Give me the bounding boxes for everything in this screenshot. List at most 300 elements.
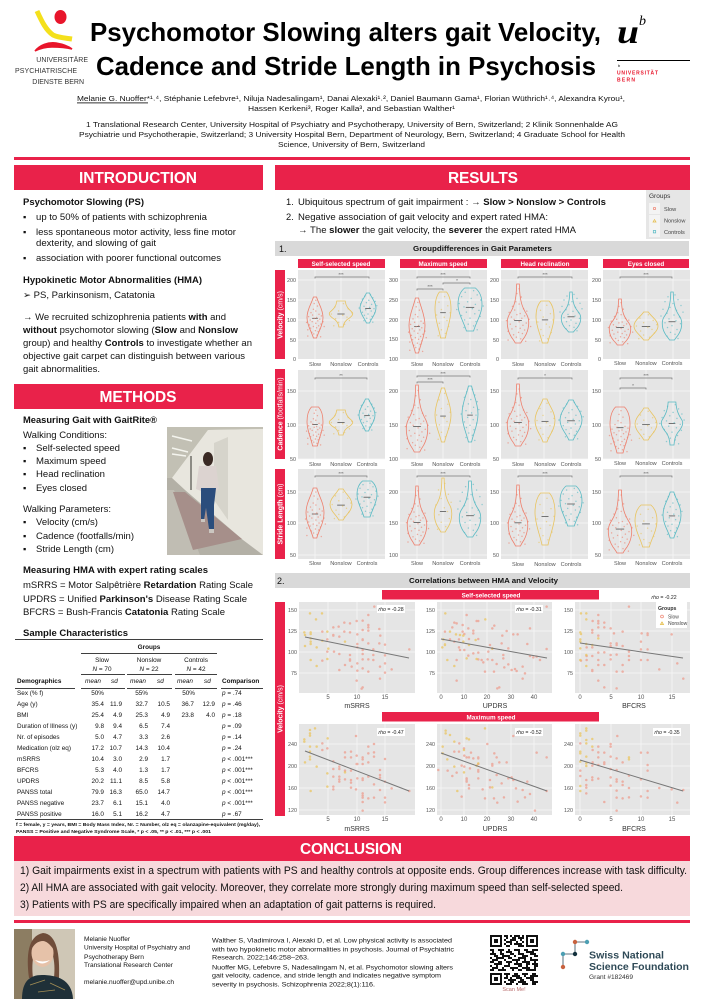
condition headers: Self-selected speed	[312, 261, 371, 268]
text block: psychomotor slowing: ▪	[23, 227, 26, 237]
scatter plot: mSRRS, self-selected: rho = -0.28	[378, 607, 404, 613]
table: sample characteristics: 4.7	[161, 811, 170, 818]
table: sample characteristics: 1.3	[139, 767, 148, 774]
text block: study aim: without psychomotor slowing ( Slow and Nonslow	[22, 325, 239, 335]
violin plot: velocity, eyes closed	[592, 270, 690, 367]
table: sample characteristics: 5.3	[95, 767, 104, 774]
scatter plot: BFCRS, maximum: 240	[564, 742, 573, 748]
violin plot: stride length, maximum: 200	[389, 490, 398, 496]
table: sample characteristics: 50%	[91, 690, 104, 697]
logo: university psychiatric services: UNIVERSITÄRE	[36, 56, 88, 64]
table: sample characteristics: 55%	[135, 690, 148, 697]
table: sample characteristics: 10.5	[158, 701, 170, 708]
panel: methods	[14, 384, 263, 835]
violin plot: cadence, self-selected: Nonslow	[330, 462, 353, 468]
scatter plot: BFCRS, maximum: 120	[564, 808, 573, 814]
table: sample characteristics: 16.0	[92, 811, 104, 818]
section header 2	[275, 573, 690, 588]
table: sample characteristics: 1.7	[161, 756, 170, 763]
text block: measuring gait: ▪	[23, 469, 26, 479]
section header 2: 2.	[277, 576, 285, 586]
text block: measuring gait: ▪	[23, 443, 26, 453]
scatter plot: BFCRS, maximum: 15	[669, 817, 676, 823]
text block: measuring gait: Stride Length (cm)	[36, 544, 114, 554]
affiliations	[79, 120, 625, 149]
violin plot: cadence, self-selected	[287, 370, 385, 468]
scatter plot: mSRRS, maximum: 160	[288, 786, 297, 792]
authors: Melanie G. Nuoffer*¹˒⁴, Stéphanie Lefebvre¹, Niluja Nadesalingam¹, Danai Alexaki¹˒², Daniel Baumann Gama¹, Florian Wüthrich¹˒⁴, Alexandra Kyrou¹,	[77, 94, 625, 103]
scatter plot: BFCRS, self-selected: BFCRS	[622, 703, 646, 710]
violin plot: velocity, maximum: 150	[389, 337, 398, 343]
table: sample characteristics: N = 42	[186, 666, 206, 673]
table: sample characteristics: PANSS = Positive and Negative Syndrome Scale, * p < .05, ** p < .01, *** p < .001	[16, 829, 211, 835]
legend: groups: Groups	[649, 193, 671, 200]
violin plot: stride length, head reclination: 150	[490, 490, 499, 496]
table: sample characteristics	[15, 628, 263, 835]
table: sample characteristics: mean	[177, 678, 193, 685]
text block: contact: Melanie Nuoffer	[84, 936, 131, 943]
violin plot: velocity, maximum: ***	[440, 272, 446, 277]
scatter plot: UPDRS, self-selected: 150	[426, 608, 435, 614]
violin plot: stride length, self-selected: Nonslow	[330, 561, 353, 567]
photo: gait carpet in corridor	[167, 427, 263, 555]
section header 2: Correlations between HMA and Velocity	[409, 576, 559, 585]
text block: expert rating scales: mSRRS = Motor Salpêtrière Retardation Rating Scale	[23, 580, 253, 590]
table: sample characteristics: sd	[111, 678, 118, 685]
scatter plot: UPDRS, self-selected	[426, 602, 552, 710]
logo: university psychiatric services	[15, 10, 88, 86]
scatter plot: BFCRS, self-selected: 125	[564, 629, 573, 635]
text block: measuring gait: ▪	[23, 544, 26, 554]
text block: expert rating scales: Measuring HMA with expert rating scales	[23, 565, 208, 575]
violin plot: stride length, eyes closed: 150	[592, 490, 601, 496]
table: sample characteristics: 9.4	[113, 723, 122, 730]
scatter plot: BFCRS, maximum: 5	[609, 817, 613, 823]
violin plot: velocity, maximum: ***	[427, 284, 433, 289]
violin plot: stride length, eyes closed: 50	[595, 553, 601, 559]
text block: hypokinetic motor abnormalities: ➢ PS, Parkinsonism, Catatonia	[23, 290, 156, 300]
scatter plot: BFCRS, self-selected: 100	[564, 650, 573, 656]
violin plot: stride length, head reclination: Slow	[512, 562, 525, 568]
violin plot: cadence, maximum: 200	[389, 389, 398, 395]
scatter plot: mSRRS, maximum	[288, 724, 415, 833]
violin plot: stride length, head reclination: Controls	[561, 562, 582, 568]
scatter plot: UPDRS, self-selected: 100	[426, 650, 435, 656]
heading: results	[275, 165, 690, 190]
logo: Swiss National Science Foundation: Science Foundation	[589, 962, 689, 973]
condition header: self-selected speed: Self-selected speed	[462, 592, 521, 600]
violin plot: stride length, self-selected: Slow	[309, 561, 322, 567]
table: sample characteristics: 4.0	[161, 800, 170, 807]
scatter plot: BFCRS, self-selected: rho = -0.22	[651, 595, 677, 601]
table: sample characteristics: 35.4	[92, 701, 104, 708]
affiliations: Psychiatrie und Psychotherapie, Switzerland; 3 University Hospital Bern, Department of Neurology, Bern, Switzerland; 4 Graduate School for Health	[79, 130, 625, 139]
scatter plot: UPDRS, self-selected: UPDRS	[483, 703, 508, 710]
text block: measuring gait: Self-selected speed	[36, 443, 120, 453]
violin plot: cadence, maximum: Controls	[460, 462, 481, 468]
violin plot: cadence, maximum: Nonslow	[432, 462, 455, 468]
text block: key findings: → The slower the gait velocity, the severer the expert rated HMA	[298, 225, 577, 235]
table: sample characteristics: Demographics	[17, 678, 62, 685]
violin plot: cadence, maximum: Slow	[411, 462, 424, 468]
violin plot: velocity, head reclination: 150	[490, 298, 499, 304]
table: sample characteristics: 2.9	[139, 756, 148, 763]
text block: psychomotor slowing: dexterity, and slowing of gait	[36, 238, 156, 248]
violin plot: velocity, self-selected: 50	[290, 338, 296, 344]
violin plot: velocity, eyes closed: Nonslow	[635, 361, 658, 367]
panel: conclusion: CONCLUSION	[300, 841, 402, 858]
text block: key findings: 2.	[286, 212, 294, 222]
scatter plot: mSRRS, self-selected: 150	[288, 608, 297, 614]
text block: contact: Translational Research Center	[84, 962, 174, 969]
violin plot: velocity, self-selected: 100	[287, 318, 296, 324]
table: sample characteristics: PANSS total	[17, 789, 52, 796]
logo: Swiss National Science Foundation: Grant #182469	[589, 974, 633, 981]
table: sample characteristics: PANSS negative	[17, 800, 65, 807]
violin plot: cadence, head reclination: 50	[493, 457, 499, 463]
scatter plot: UPDRS, self-selected: rho = -0.31	[516, 607, 542, 613]
table: sample characteristics: 50%	[182, 690, 195, 697]
row tab: stride length	[275, 469, 285, 559]
affiliations: 1 Translational Research Center, University Hospital of Psychiatry and Psychotherapy, University of Bern, Switzerland; 2 Klinik Sonnenhalde AG	[86, 120, 618, 129]
table: sample characteristics: 14.3	[136, 745, 148, 752]
scatter plot: BFCRS, maximum: 10	[638, 817, 645, 823]
violin plot: velocity, eyes closed: Slow	[614, 361, 627, 367]
scatter plot: mSRRS, maximum: rho = -0.47	[378, 730, 404, 736]
affiliations: Science, University of Bern, Switzerland	[278, 140, 425, 149]
row tab: velocity	[275, 270, 285, 359]
table: sample characteristics: 15.1	[136, 800, 148, 807]
table: sample characteristics: p = .09	[221, 723, 242, 730]
text block: contact: University Hospital of Psychiatry and	[84, 944, 190, 952]
table: sample characteristics: p = .46	[221, 701, 242, 708]
violin plot: velocity, eyes closed: 50	[595, 338, 601, 344]
table: sample characteristics: 23.8	[182, 712, 194, 719]
scatter plot: mSRRS, self-selected: mSRRS	[344, 703, 370, 710]
table: sample characteristics: p < .001***	[221, 767, 253, 774]
table: sample characteristics: 23.7	[92, 800, 104, 807]
scatter plot: UPDRS, maximum: UPDRS	[483, 826, 508, 833]
text block: measuring gait: Head reclination	[36, 469, 105, 479]
violin plot: velocity, self-selected: 0	[293, 357, 296, 363]
violin plot: stride length, eyes closed: Nonslow	[635, 561, 658, 567]
scatter plot: UPDRS, self-selected: 30	[508, 695, 515, 701]
table: sample characteristics: 65.0	[136, 789, 148, 796]
scatter plot: BFCRS, maximum: BFCRS	[622, 826, 646, 833]
text block: psychomotor slowing: Psychomotor Slowing (PS)	[23, 197, 144, 207]
row tab: stride length: Stride Length (cm)	[278, 483, 284, 545]
table: sample characteristics: 79.9	[92, 789, 104, 796]
scatter plot: mSRRS, self-selected: 125	[288, 629, 297, 635]
table: sample characteristics: 3.0	[113, 756, 122, 763]
table: sample characteristics: 10.4	[158, 745, 170, 752]
violin plot: stride length, head reclination: ***	[542, 471, 548, 476]
violin plot: stride length, maximum: 150	[389, 521, 398, 527]
text block: measuring gait: Maximum speed	[36, 456, 106, 466]
panel: results	[275, 165, 690, 833]
text block: references: Nuoffer MG, Lefebvre S, Nadesalingam N, et al. Psychomotor slowing alters	[212, 964, 454, 972]
violin plot: cadence, eyes closed: ***	[643, 373, 649, 378]
table: sample characteristics: N = 22	[139, 666, 159, 673]
panel: introduction	[14, 165, 263, 374]
violin plot: velocity, maximum: Controls	[460, 362, 481, 368]
table: sample characteristics: 6.5	[139, 723, 148, 730]
logo: Swiss National Science Foundation: Swiss National	[589, 950, 664, 962]
table: sample characteristics: Duration of Illness (y)	[17, 723, 77, 730]
table: sample characteristics: 4.9	[113, 712, 122, 719]
scatter plot: mSRRS, self-selected: 100	[288, 650, 297, 656]
table: sample characteristics: Slow	[95, 657, 109, 664]
scatter plot: UPDRS, maximum: 240	[426, 742, 435, 748]
scatter plot: UPDRS, maximum: 120	[426, 808, 435, 814]
text block: psychomotor slowing: up to 50% of patients with schizophrenia	[36, 212, 208, 222]
scatter plot: UPDRS, maximum: 20	[484, 817, 491, 823]
table: sample characteristics: mean	[130, 678, 146, 685]
panel: conclusion: 3) Patients with PS are specifically impaired when an adaptation of gait patterns is required.	[20, 899, 436, 911]
violin plot: velocity, maximum: 100	[389, 357, 398, 363]
text block: references: gait velocity, cadence, and stride length and indicates negative symptom	[212, 972, 441, 980]
text block: study aim	[22, 312, 252, 374]
text block: hypokinetic motor abnormalities	[23, 275, 202, 300]
row tab: velocity scatter: Velocity (cm/s)	[278, 685, 284, 733]
table: sample characteristics: 17.2	[92, 745, 104, 752]
table: sample characteristics: Age (y)	[17, 701, 38, 708]
table: sample characteristics: Medication (olz eq)	[17, 745, 71, 752]
heading: results: RESULTS	[448, 170, 518, 187]
violin plot: velocity, head reclination: 100	[490, 318, 499, 324]
scatter plot: UPDRS, self-selected: 125	[426, 629, 435, 635]
scatter plot: BFCRS, self-selected: 10	[638, 695, 645, 701]
table: sample characteristics: f = female, y = years, BMI = Body Mass Index, Nr. = Number, olz eq = olanzapine-equivalent (mg/day),	[16, 822, 261, 828]
condition header: self-selected speed	[382, 590, 599, 600]
QR code: Scan Me!	[502, 987, 526, 993]
title	[90, 17, 601, 81]
violin plot: cadence, eyes closed: 150	[592, 389, 601, 395]
scatter plot: UPDRS, maximum: 30	[508, 817, 515, 823]
section header 1: Groupdifferences in Gait Parameters	[413, 244, 552, 253]
row tab: cadence: Cadence (footfalls/min)	[278, 377, 284, 451]
table: sample characteristics: 8.5	[139, 778, 148, 785]
violin plot: velocity, self-selected: ***	[338, 272, 344, 277]
table: sample characteristics: Controls	[184, 657, 208, 664]
violin plot: velocity, maximum: Nonslow	[432, 362, 455, 368]
violin plot: velocity, eyes closed: Controls	[662, 361, 683, 367]
violin plot: cadence, self-selected: **	[339, 373, 343, 378]
row tab: cadence	[275, 369, 285, 459]
violin plot: cadence, maximum: ***	[427, 377, 433, 382]
violin plot: velocity, self-selected: Controls	[358, 362, 379, 368]
scatter plot: mSRRS, maximum: mSRRS	[344, 826, 370, 833]
text block: measuring gait: ▪	[23, 456, 26, 466]
violin plot: cadence, maximum: ***	[440, 371, 446, 376]
text block: measuring gait: ▪	[23, 517, 26, 527]
violin plot: stride length, maximum: ***	[440, 471, 446, 476]
authors: Hassen Kerkeni³, Roger Kalla³, and Sebastian Walther¹	[248, 104, 456, 113]
scatter plot: UPDRS, maximum: 0	[439, 817, 443, 823]
text block: measuring gait: Cadence (footfalls/min)	[36, 531, 134, 541]
table: sample characteristics: 5.0	[95, 734, 104, 741]
violin plot: stride length, self-selected: 50	[290, 553, 296, 559]
violin plot: cadence, head reclination: *	[544, 373, 546, 378]
condition header: maximum speed: Maximum speed	[466, 714, 516, 722]
scatter plot: mSRRS, self-selected	[288, 602, 415, 710]
logo: university of Bern: b	[618, 63, 621, 68]
scatter plot: mSRRS, maximum: 15	[382, 817, 389, 823]
text block: contact: Psychotherapy Bern	[84, 954, 144, 961]
logo: university of Bern: u	[617, 14, 639, 51]
text block: measuring gait	[23, 415, 157, 554]
scatter plot: mSRRS, self-selected: 10	[354, 695, 361, 701]
table: sample characteristics: sd	[157, 678, 164, 685]
table: sample characteristics: p = .67	[221, 811, 242, 818]
table: sample characteristics: Sex (% f)	[17, 690, 43, 697]
text block: measuring gait: Walking Conditions:	[23, 430, 107, 440]
heading: methods	[14, 384, 263, 409]
logo: university psychiatric services: PSYCHIATRISCHE	[15, 68, 77, 75]
text block: key findings: Negative association of gait velocity and expert rated HMA:	[298, 212, 548, 222]
table: sample characteristics: mSRRS	[17, 756, 40, 763]
legend: groups: Slow	[664, 207, 677, 213]
scatter plot: BFCRS, maximum: 160	[564, 786, 573, 792]
violin plot: stride length, self-selected: 100	[287, 521, 296, 527]
table: sample characteristics: 20.2	[92, 778, 104, 785]
text block: measuring gait: Measuring Gait with GaitRite®	[23, 415, 157, 425]
scatter plot: mSRRS, self-selected: 75	[291, 671, 297, 677]
section header 1	[275, 241, 689, 256]
table: sample characteristics: 4.7	[113, 734, 122, 741]
table: sample characteristics: 36.7	[182, 701, 194, 708]
QR code	[490, 935, 538, 993]
violin plot: velocity, self-selected: 200	[287, 278, 296, 284]
violin plot: stride length, eyes closed: Slow	[614, 561, 627, 567]
table: sample characteristics: 10.4	[92, 756, 104, 763]
violin plot: stride length, self-selected: 150	[287, 490, 296, 496]
table: sample characteristics: p < .001***	[221, 778, 253, 785]
violin plot: velocity, maximum	[389, 270, 487, 368]
violin plot: cadence, eyes closed: 100	[592, 423, 601, 429]
violin plot: velocity, head reclination	[490, 270, 588, 368]
panel: conclusion	[14, 836, 690, 916]
violin plot: cadence, head reclination: Controls	[561, 462, 582, 468]
scatter plot: UPDRS, maximum: rho = -0.52	[516, 730, 542, 736]
scatter plot: mSRRS, maximum: 5	[326, 817, 330, 823]
violin plot: stride length, self-selected	[287, 469, 385, 567]
text block: study aim: group) and healthy Controls to investigate whether an	[23, 338, 252, 348]
violin plot: velocity, head reclination: 0	[496, 357, 499, 363]
table: sample characteristics: N = 70	[92, 666, 112, 673]
scatter plot: UPDRS, maximum: 40	[531, 817, 538, 823]
table: sample characteristics: 16.2	[136, 811, 148, 818]
text block: references: Research. 2022;146:258–263.	[212, 954, 309, 962]
violin plot: cadence, eyes closed: Controls	[662, 461, 683, 467]
table: sample characteristics: 14.7	[158, 789, 170, 796]
legend: scatter groups	[656, 602, 688, 628]
text block: psychomotor slowing: ▪	[23, 212, 26, 222]
text block: measuring gait: Eyes closed	[36, 483, 87, 493]
violin plot: velocity, head reclination: 200	[490, 278, 499, 284]
scatter plot: UPDRS, self-selected: 20	[484, 695, 491, 701]
text block: psychomotor slowing: association with poorer functional outcomes	[36, 253, 221, 263]
table: sample characteristics: mean	[85, 678, 101, 685]
table: sample characteristics: BFCRS	[17, 767, 39, 774]
text block: measuring gait: ▪	[23, 483, 26, 493]
logo: university of Bern	[617, 14, 690, 84]
condition headers: Maximum speed	[418, 261, 468, 268]
text block: key findings	[286, 197, 606, 235]
scatter plot: UPDRS, self-selected: 10	[461, 695, 468, 701]
violin plot: velocity, eyes closed: 150	[592, 298, 601, 304]
table: sample characteristics: 6.1	[113, 800, 122, 807]
text block: references: severity in psychosis. Schizophrenia 2022;8(1):116.	[212, 982, 375, 988]
violin plot: cadence, eyes closed: Nonslow	[635, 461, 658, 467]
text block: hypokinetic motor abnormalities: Hypokinetic Motor Abnormalities (HMA)	[23, 275, 202, 285]
text block: study aim: objective gait carpet can distinguish between various	[23, 351, 245, 361]
scatter plot: mSRRS, maximum: 120	[288, 808, 297, 814]
panel: conclusion: 2) All HMA are associated with gait velocity. Moreover, they correlate more strongly during maximum speed than self-selected speed.	[20, 882, 623, 894]
table: sample characteristics: UPDRS	[17, 778, 39, 785]
table: sample characteristics: 32.7	[136, 701, 148, 708]
table: sample characteristics: 7.4	[161, 723, 170, 730]
table: sample characteristics: Groups	[138, 644, 161, 651]
logo: university of Bern: UNIVERSITÄT	[617, 70, 658, 76]
violin plot: velocity, head reclination: 50	[493, 338, 499, 344]
table: sample characteristics: p < .001***	[221, 800, 253, 807]
scatter plot: mSRRS, self-selected: 5	[326, 695, 330, 701]
text block: key findings: Ubiquitous spectrum of gait impairment : → Slow > Nonslow > Controls	[298, 197, 606, 207]
table: sample characteristics: Sample Characteristics	[23, 628, 128, 638]
violin plot: stride length, maximum	[389, 469, 487, 567]
legend: groups	[646, 190, 690, 239]
text block: study aim: gait abnormalities.	[23, 364, 100, 374]
scatter plot: BFCRS, maximum: rho = -0.35	[654, 730, 680, 736]
violin plot: velocity, self-selected: Slow	[309, 362, 322, 368]
legend: scatter groups: Slow	[668, 614, 679, 620]
violin plot: cadence, self-selected: 100	[287, 423, 296, 429]
panel: conclusion: 1) Gait impairments exist in a spectrum with patients with PS and healthy controls at opposite ends. Group differences increase with task difficulty.	[20, 865, 687, 877]
violin plot: velocity, maximum: *	[456, 278, 458, 283]
violin plot: stride length, eyes closed	[592, 469, 690, 567]
text block: measuring gait: Walking Parameters:	[23, 504, 111, 514]
scatter plot: UPDRS, self-selected: 75	[429, 671, 435, 677]
table: sample characteristics: Comparison	[222, 678, 259, 685]
text block: measuring gait: Velocity (cm/s)	[36, 517, 98, 527]
scatter plot: BFCRS, maximum	[564, 724, 690, 833]
row tab: velocity: Velocity (cm/s)	[278, 291, 284, 339]
violin plot: cadence, maximum: 150	[389, 423, 398, 429]
table: sample characteristics: BMI	[17, 712, 29, 719]
violin plot: velocity, eyes closed: 200	[592, 278, 601, 284]
table: sample characteristics: 3.3	[139, 734, 148, 741]
table: sample characteristics: 2.6	[161, 734, 170, 741]
table: sample characteristics: 12.9	[203, 701, 215, 708]
text block: references: Walther S, Vladimirova I, Alexaki D, et al. Low physical activity is associated	[212, 938, 452, 944]
legend: groups: Controls	[664, 230, 685, 236]
legend: scatter groups: Nonslow	[668, 621, 688, 627]
violin plot: velocity, eyes closed: 0	[598, 357, 601, 363]
scatter plot: UPDRS, self-selected: 40	[531, 695, 538, 701]
table: sample characteristics: 10.7	[110, 745, 122, 752]
violin plot: stride length, maximum: 100	[389, 553, 398, 559]
table: sample characteristics: 4.0	[113, 767, 122, 774]
scatter plot: BFCRS, self-selected: 5	[609, 695, 613, 701]
scatter plot: BFCRS, maximum: 0	[578, 817, 582, 823]
table: sample characteristics: 11.1	[110, 778, 122, 785]
legend: groups: Nonslow	[664, 218, 686, 224]
text block: psychomotor slowing: less spontaneous motor activity, less fine motor	[36, 227, 236, 237]
violin plot: stride length, eyes closed: 100	[592, 521, 601, 527]
violin plot: stride length, eyes closed: ***	[643, 471, 649, 476]
table: sample characteristics: 11.9	[110, 701, 122, 708]
